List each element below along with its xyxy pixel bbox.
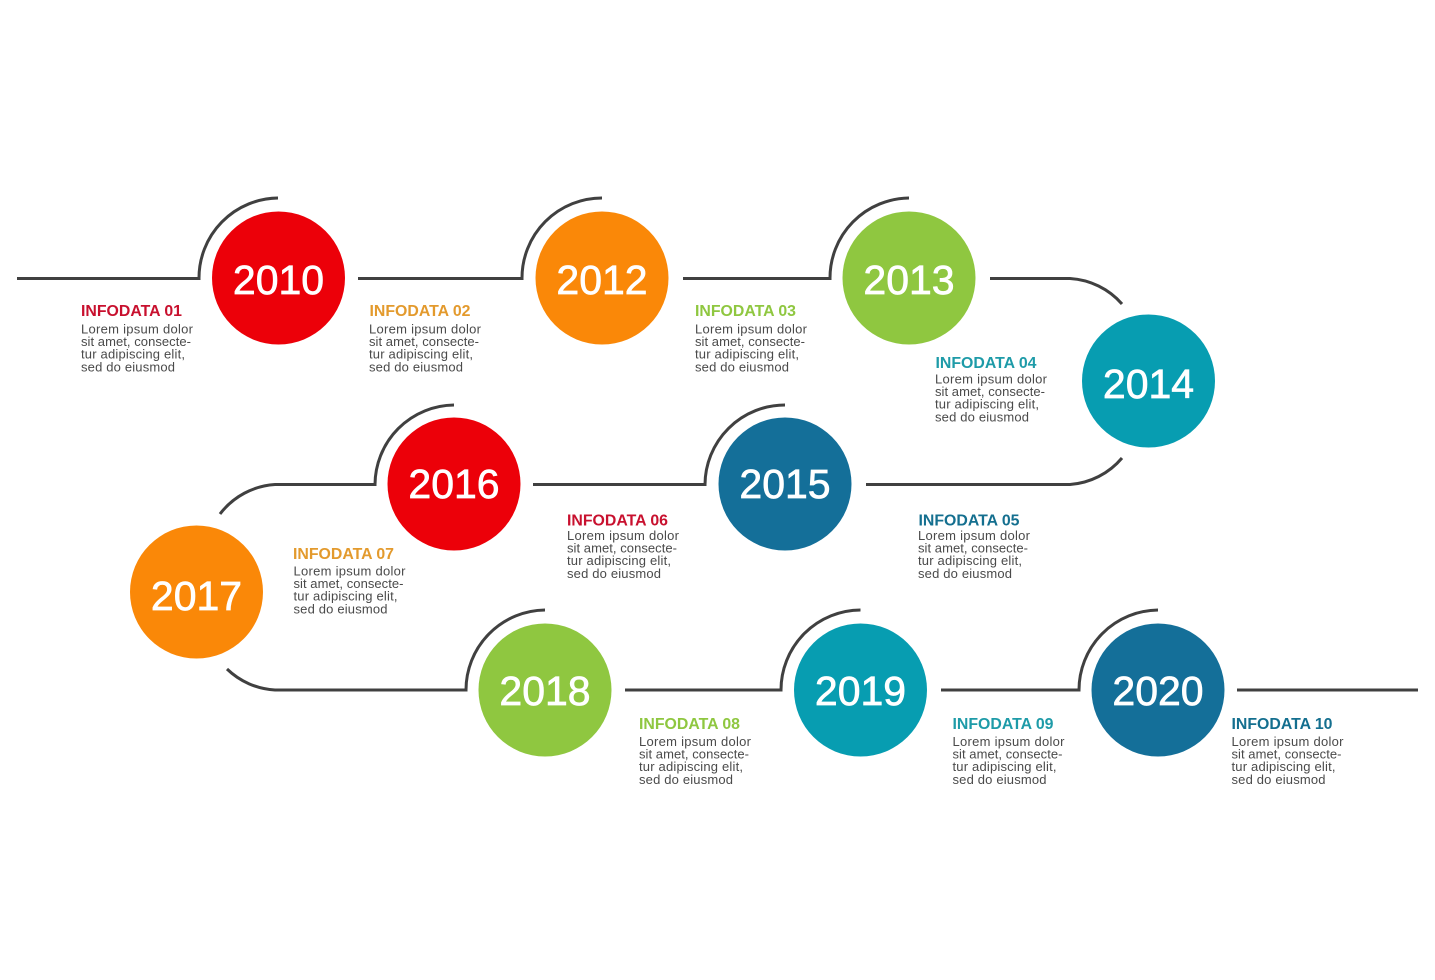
- text block: infodata 04: Lorem ipsum dolor: [935, 372, 1048, 386]
- text block: infodata 09: tur adipiscing elit,: [952, 759, 1056, 774]
- text block: infodata 01: [81, 303, 194, 374]
- text block: infodata 06: Lorem ipsum dolor: [567, 528, 680, 543]
- text block: infodata 04: sit amet, consecte-: [935, 384, 1045, 399]
- text block: infodata 02: Lorem ipsum dolor: [369, 322, 482, 336]
- text block: infodata 06: sit amet, consecte-: [567, 540, 677, 556]
- text block: infodata 07: sit amet, consecte-: [294, 576, 404, 591]
- text block: infodata 01: sed do eiusmod: [81, 360, 175, 374]
- text block: infodata 04: [935, 355, 1048, 424]
- node: 2015: 2015: [739, 461, 831, 507]
- node: 2015: [718, 418, 852, 550]
- node: 2014: [1082, 314, 1215, 448]
- text block: infodata 01: INFODATA 01: [81, 303, 182, 320]
- node: 2020: [1092, 624, 1224, 756]
- text block: infodata 01: tur adipiscing elit,: [81, 346, 185, 362]
- text block: infodata 03: tur adipiscing elit,: [695, 346, 799, 362]
- text block: infodata 10: INFODATA 10: [1232, 716, 1332, 733]
- text block: infodata 03: Lorem ipsum dolor: [695, 322, 808, 336]
- text block: infodata 09: [952, 716, 1065, 787]
- text block: infodata 10: Lorem ipsum dolor: [1232, 734, 1344, 749]
- text block: infodata 05: Lorem ipsum dolor: [918, 528, 1031, 543]
- text block: infodata 08: sed do eiusmod: [639, 772, 733, 787]
- node: 2010: [212, 212, 345, 344]
- node: 2019: 2019: [815, 668, 906, 714]
- timeline path: [17, 198, 1418, 690]
- text block: infodata 03: sed do eiusmod: [695, 360, 789, 374]
- text block: infodata 03: INFODATA 03: [695, 303, 796, 320]
- text block: infodata 08: Lorem ipsum dolor: [639, 734, 752, 749]
- text block: infodata 05: sit amet, consecte-: [918, 540, 1028, 556]
- text block: infodata 04: tur adipiscing elit,: [935, 396, 1039, 412]
- text block: infodata 09: Lorem ipsum dolor: [952, 734, 1065, 749]
- text block: infodata 02: INFODATA 02: [370, 303, 470, 320]
- text block: infodata 07: INFODATA 07: [293, 546, 394, 563]
- text block: infodata 07: sed do eiusmod: [294, 602, 388, 616]
- node: 2018: 2018: [499, 668, 591, 714]
- node: 2016: [388, 418, 520, 550]
- text block: infodata 10: sed do eiusmod: [1232, 772, 1326, 787]
- text block: infodata 07: Lorem ipsum dolor: [294, 564, 406, 578]
- text block: infodata 03: sit amet, consecte-: [695, 334, 805, 349]
- text block: infodata 03: [695, 303, 808, 374]
- text block: infodata 08: INFODATA 08: [639, 716, 740, 733]
- node: 2010: 2010: [233, 257, 324, 303]
- text block: infodata 02: sed do eiusmod: [369, 360, 463, 374]
- text block: infodata 02: [369, 303, 482, 374]
- text block: infodata 02: tur adipiscing elit,: [369, 346, 473, 362]
- text block: infodata 06: INFODATA 06: [567, 512, 668, 530]
- text block: infodata 10: tur adipiscing elit,: [1232, 759, 1336, 774]
- text block: infodata 05: tur adipiscing elit,: [918, 553, 1022, 568]
- text block: infodata 10: sit amet, consecte-: [1232, 746, 1342, 762]
- text block: infodata 10: [1232, 716, 1344, 787]
- text block: infodata 06: sed do eiusmod: [567, 566, 661, 581]
- node: 2019: [794, 624, 927, 756]
- text block: infodata 09: INFODATA 09: [952, 716, 1054, 733]
- text block: infodata 08: sit amet, consecte-: [639, 746, 749, 762]
- text block: infodata 01: sit amet, consecte-: [81, 334, 191, 349]
- text block: infodata 04: sed do eiusmod: [935, 410, 1029, 424]
- text block: infodata 09: sed do eiusmod: [952, 772, 1046, 787]
- node: 2013: 2013: [863, 257, 955, 303]
- node: 2014: 2014: [1103, 361, 1194, 407]
- text block: infodata 08: tur adipiscing elit,: [639, 759, 743, 774]
- text block: infodata 05: INFODATA 05: [918, 512, 1020, 530]
- node: 2012: [536, 212, 668, 344]
- text block: infodata 01: Lorem ipsum dolor: [81, 322, 194, 336]
- text block: infodata 09: sit amet, consecte-: [952, 746, 1062, 762]
- text block: infodata 08: [639, 716, 752, 787]
- text block: infodata 02: sit amet, consecte-: [369, 334, 479, 349]
- node: 2017: [130, 526, 263, 658]
- node: 2012: 2012: [556, 257, 648, 303]
- text block: infodata 04: INFODATA 04: [936, 355, 1037, 372]
- text block: infodata 05: sed do eiusmod: [918, 566, 1012, 581]
- node: 2016: 2016: [408, 461, 500, 507]
- node: 2020: 2020: [1112, 668, 1204, 714]
- text block: infodata 07: tur adipiscing elit,: [294, 588, 398, 604]
- text block: infodata 06: tur adipiscing elit,: [567, 553, 671, 568]
- node: 2017: 2017: [151, 573, 242, 619]
- node: 2018: [478, 624, 612, 756]
- text block: infodata 06: [567, 512, 680, 581]
- node: 2013: [842, 212, 976, 344]
- text block: infodata 05: [918, 512, 1031, 581]
- text block: infodata 07: [293, 546, 406, 616]
